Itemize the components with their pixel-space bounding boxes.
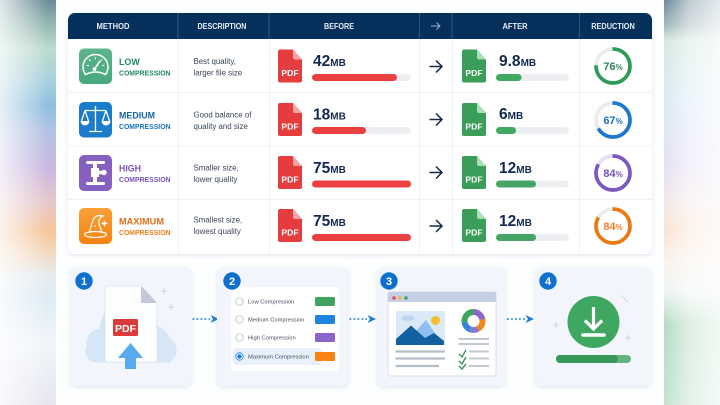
row: low compression: PDF (465, 68, 483, 78)
reduction ring 76% (596, 49, 630, 83)
icon: cloud (85, 302, 177, 363)
row: low compression: 42MB (313, 53, 346, 70)
row: medium compression: MEDIUM (119, 110, 155, 122)
checkmarks (459, 350, 466, 369)
table header: DESCRIPTION (198, 22, 247, 31)
options card: Maximum Compression (248, 354, 309, 360)
reduction ring 67%: 67% (603, 115, 623, 127)
donut chart (461, 309, 486, 333)
row: high compression: 12MB (499, 160, 532, 177)
reduction ring 84%: 84% (603, 221, 623, 233)
arrow: step 2 to 3 (350, 315, 376, 323)
row: medium compression (79, 102, 630, 138)
row: low compression: 9.8MB (499, 53, 536, 70)
row: high compression: lower quality (194, 175, 237, 184)
table header: AFTER (502, 22, 528, 31)
row: high compression: HIGH (119, 164, 141, 174)
sparkles (161, 288, 174, 310)
icon: wizard hat (79, 208, 112, 244)
row: low compression (79, 48, 630, 84)
row: low compression: Best quality, (194, 57, 236, 66)
step 3: preview result (377, 267, 506, 386)
table header: METHOD (96, 22, 130, 31)
row: low compression: LOW (119, 57, 141, 68)
options card: Medium Compression (248, 318, 304, 324)
row: medium compression: quality and size (194, 122, 249, 131)
row: high compression: COMPRESSION (119, 175, 170, 184)
options card: High Compression (248, 336, 296, 342)
sparkles (553, 296, 631, 341)
options card (231, 287, 339, 371)
step 2: choose compression (217, 267, 349, 386)
reduction ring 84%: 84% (603, 168, 623, 180)
arrow: step 1 to 2 (192, 315, 219, 323)
row: medium compression: PDF (465, 122, 483, 132)
browser window (388, 292, 496, 376)
row: medium compression: 18MB (313, 106, 346, 124)
badge 2: 2 (229, 276, 235, 288)
row: maximum compression: PDF (465, 228, 483, 238)
table header: BEFORE (324, 22, 354, 31)
row: maximum compression: Smallest size, (194, 216, 242, 224)
row: medium compression: Good balance of (194, 110, 252, 120)
row: low compression: COMPRESSION (119, 68, 170, 78)
arrow: step 3 to 4 (507, 315, 534, 323)
step 1: upload PDF (70, 267, 192, 386)
reduction ring 67% (596, 103, 630, 137)
icon: balance scale (79, 102, 112, 138)
reduction ring 84% (596, 156, 630, 190)
row: high compression: PDF (281, 174, 299, 184)
row: maximum compression: lowest quality (194, 227, 241, 236)
badge 3: 3 (386, 276, 392, 288)
row: high compression: PDF (465, 174, 483, 184)
progress bar (556, 355, 631, 363)
PDF label: PDF (115, 323, 137, 335)
badge 4: 4 (545, 276, 552, 288)
icon: document (105, 286, 157, 362)
comparison table (68, 13, 652, 254)
table header (68, 13, 652, 39)
row: high compression: Smaller size, (194, 164, 239, 172)
options card: Low Compression (248, 300, 294, 306)
table header: REDUCTION (591, 22, 635, 31)
row: maximum compression: COMPRESSION (119, 228, 170, 237)
reduction ring 76%: 76% (603, 61, 623, 73)
icon: download circle (568, 296, 620, 348)
row: maximum compression: 75MB (313, 213, 346, 230)
icon: gauge (79, 48, 112, 84)
row: maximum compression: 12MB (499, 213, 532, 230)
row: medium compression: 6MB (499, 106, 523, 123)
row: low compression: larger file size (194, 68, 243, 78)
row: medium compression: COMPRESSION (119, 122, 170, 131)
reduction ring 84% (596, 209, 630, 243)
step 4: download (535, 267, 651, 386)
icon: clamp (79, 155, 112, 191)
row: maximum compression: MAXIMUM (119, 216, 164, 228)
row: high compression (79, 155, 630, 191)
image thumbnail (396, 311, 445, 345)
badge 1: 1 (81, 276, 87, 288)
row: low compression: PDF (281, 68, 299, 78)
row: medium compression: PDF (281, 122, 299, 132)
row: maximum compression (79, 208, 630, 244)
row: maximum compression: PDF (281, 228, 299, 238)
row: high compression: 75MB (313, 160, 346, 177)
icon: upload arrow (118, 343, 143, 369)
